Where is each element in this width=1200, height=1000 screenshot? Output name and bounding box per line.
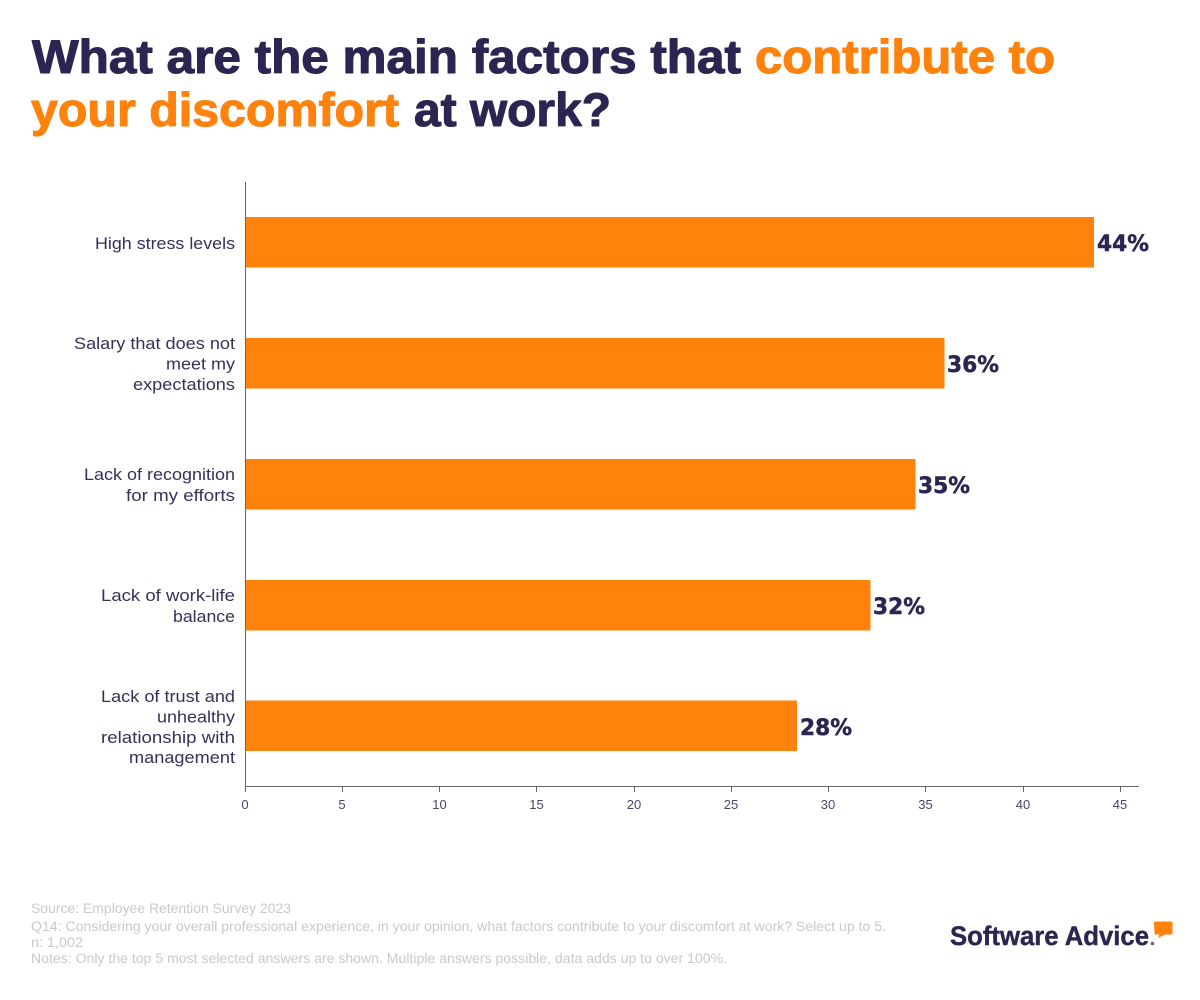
- x axis labels: 25: [724, 797, 738, 812]
- icon: speech bubble: [1154, 922, 1172, 938]
- bar: trust: Lack of trust and: [101, 688, 235, 706]
- source notes: [31, 901, 886, 966]
- chart axes: [246, 182, 1139, 792]
- bar: salary: Salary that does not: [74, 335, 235, 353]
- title: [31, 30, 1055, 136]
- bar: work-life balance: Lack of work-life: [101, 587, 235, 605]
- bar: salary: [74, 335, 999, 394]
- x axis labels: 40: [1016, 797, 1030, 812]
- source notes: Q14: Considering your overall professional experience, in your opinion, what factors contribute to your discomfort at work? Select up to 5.: [31, 919, 886, 934]
- bar chart: [74, 182, 1149, 812]
- title: contribute to: [755, 30, 1055, 83]
- bar: high stress levels: 44%: [1097, 232, 1149, 257]
- source notes: Notes: Only the top 5 most selected answers are shown. Multiple answers possible, data adds up to over 100%.: [31, 951, 727, 966]
- bar: recognition: [84, 459, 970, 510]
- title: What are the main factors that: [32, 30, 741, 83]
- x axis labels: 10: [432, 797, 447, 812]
- bar: recognition: for my efforts: [126, 487, 235, 505]
- bar: trust: unhealthy: [157, 708, 236, 726]
- source notes: Source: Employee Retention Survey 2023: [31, 901, 291, 916]
- bar: salary: meet my: [166, 356, 236, 374]
- x axis labels: 30: [821, 797, 835, 812]
- bar: trust: management: [129, 749, 235, 767]
- bar: recognition: 35%: [918, 474, 970, 499]
- bar: salary: 36%: [947, 353, 999, 378]
- bar: trust: relationship with: [101, 729, 235, 747]
- title: at work?: [414, 83, 611, 136]
- bar: high stress levels: High stress levels: [95, 235, 235, 253]
- logo: Software Advice: Software Advice: [950, 921, 1149, 951]
- bar: trust: 28%: [800, 716, 852, 741]
- bar: work-life balance: balance: [173, 608, 235, 626]
- bar: salary: expectations: [133, 376, 235, 394]
- bar: recognition: Lack of recognition: [84, 466, 235, 484]
- x axis labels: 35: [918, 797, 933, 812]
- title: your discomfort: [31, 83, 399, 136]
- x axis labels: 15: [529, 797, 544, 812]
- bar: trust: [101, 688, 852, 767]
- bar: high stress levels: [95, 217, 1149, 268]
- bar: work-life balance: 32%: [873, 595, 925, 620]
- x axis labels: 45: [1113, 797, 1127, 812]
- source notes: n: 1,002: [31, 935, 83, 950]
- x axis labels: 5: [338, 797, 346, 812]
- x axis labels: 20: [627, 797, 641, 812]
- x axis labels: 0: [241, 797, 249, 812]
- x axis labels: [241, 797, 1127, 812]
- bar: work-life balance: [101, 580, 925, 630]
